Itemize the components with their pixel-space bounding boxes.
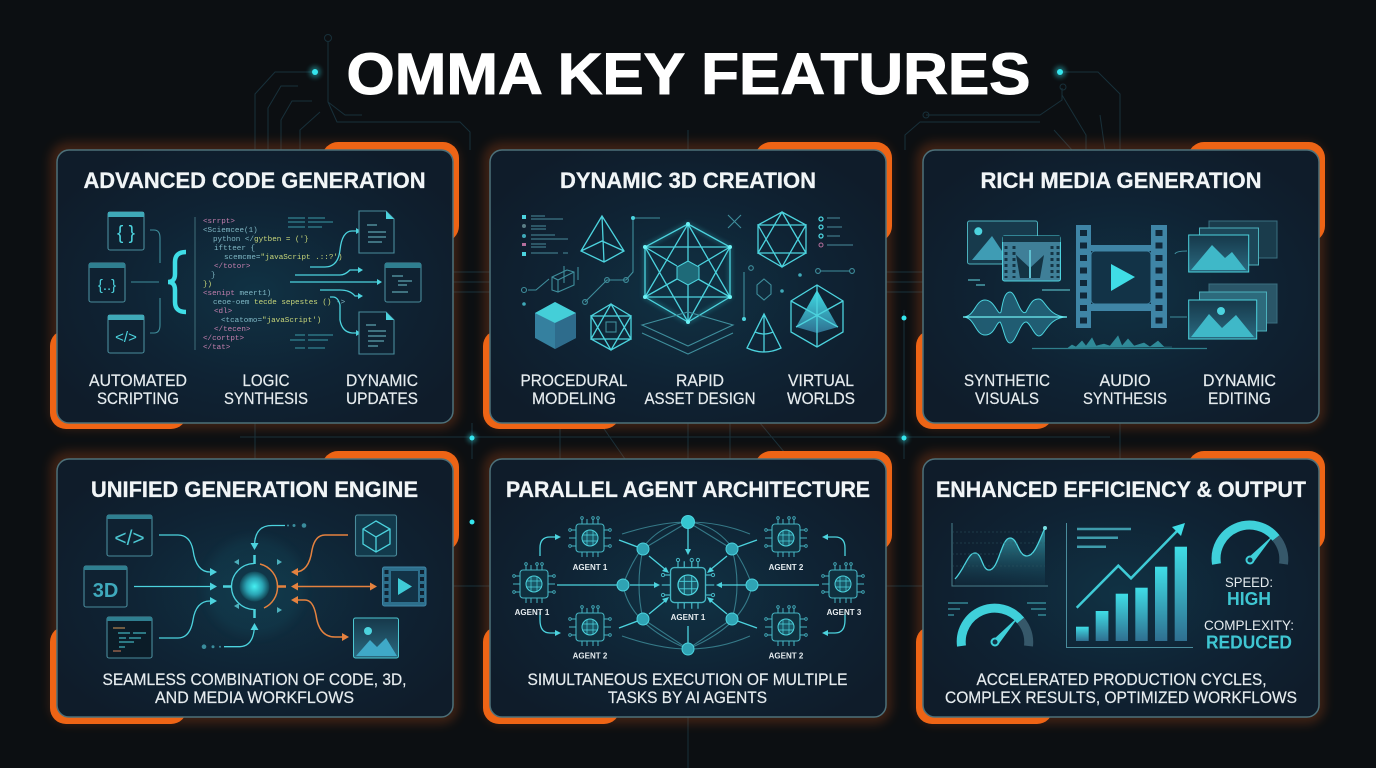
code block: </tat>	[203, 344, 231, 352]
left shapes	[522, 215, 660, 350]
description: SIMULTANEOUS EXECUTION OF MULTIPLE	[528, 671, 848, 689]
code block: <senipt meert1)	[203, 290, 271, 298]
heading: RICH MEDIA GENERATION	[980, 168, 1262, 193]
icons: input windows: </>	[115, 329, 137, 346]
circuit background	[240, 34, 1120, 768]
gauge right	[1216, 525, 1284, 564]
stats: HIGH	[1227, 589, 1271, 609]
network connections	[540, 516, 845, 655]
panel: enhanced efficiency and output	[916, 451, 1325, 724]
agent chips	[513, 517, 864, 660]
agent chips: AGENT 2	[769, 563, 804, 572]
labels: AUDIO	[1100, 372, 1151, 390]
icons: input windows	[89, 212, 160, 353]
agent chips: AGENT 1	[573, 563, 608, 572]
icon: large brace	[168, 252, 186, 312]
labels	[89, 372, 418, 408]
panel: parallel agent architecture	[483, 451, 892, 724]
labels	[964, 372, 1276, 408]
audio waveform	[963, 280, 1070, 343]
area chart	[952, 523, 1048, 586]
agent chips: AGENT 2	[769, 652, 804, 660]
description: TASKS BY AI AGENTS	[608, 689, 767, 707]
image stacks	[1170, 221, 1277, 339]
icons: input windows: { }	[117, 223, 135, 244]
panel: advanced code generation	[50, 142, 459, 429]
description: AND MEDIA WORKFLOWS	[155, 689, 354, 707]
labels: EDITING	[1208, 390, 1271, 408]
description	[528, 671, 848, 707]
bar chart with trend arrow	[1066, 523, 1193, 648]
gauge left	[948, 603, 1046, 646]
heading: PARALLEL AGENT ARCHITECTURE	[506, 477, 870, 502]
central engine with arrows	[134, 523, 377, 649]
agent chips: AGENT 1	[671, 613, 706, 622]
agent chips: AGENT 3	[827, 608, 862, 617]
agent chips: AGENT 1	[515, 608, 550, 617]
labels: MODELING	[532, 390, 616, 408]
agent chips: AGENT 2	[573, 652, 608, 660]
labels: SCRIPTING	[97, 390, 179, 408]
labels	[520, 372, 855, 408]
code block: }	[211, 272, 216, 280]
stats: SPEED:	[1225, 574, 1273, 590]
labels: VISUALS	[975, 390, 1039, 408]
code block: iftteer {	[214, 245, 255, 253]
labels: SYNTHESIS	[1083, 390, 1167, 408]
film strip with play button	[1076, 225, 1167, 328]
right shapes	[728, 212, 854, 352]
heading: ENHANCED EFFICIENCY & OUTPUT	[936, 477, 1306, 502]
labels: DYNAMIC	[1203, 372, 1276, 390]
labels: LOGIC	[242, 372, 290, 390]
description	[945, 671, 1297, 707]
icons: input windows: {..}	[98, 277, 116, 294]
title: OMMA KEY FEATURES	[346, 42, 1030, 107]
code block: </cortpt>	[203, 335, 244, 343]
input icons	[84, 515, 152, 658]
panel: rich media generation	[916, 142, 1325, 429]
labels: UPDATES	[346, 390, 418, 408]
code block: <srrpt>	[203, 218, 235, 226]
code block	[195, 217, 346, 352]
glowing circuit nodes	[309, 66, 1066, 524]
labels: SYNTHETIC	[964, 372, 1050, 390]
stats	[1204, 574, 1294, 652]
heading: DYNAMIC 3D CREATION	[560, 168, 816, 193]
stats: COMPLEXITY:	[1204, 617, 1294, 633]
description: COMPLEX RESULTS, OPTIMIZED WORKFLOWS	[945, 689, 1297, 707]
code block: })	[203, 281, 212, 289]
labels: WORLDS	[787, 390, 855, 408]
labels: DYNAMIC	[346, 372, 418, 390]
labels: PROCEDURAL	[520, 372, 628, 390]
input icons: 3D	[93, 580, 118, 602]
labels: ASSET DESIGN	[644, 390, 756, 408]
code block: <tcatomo="javaScript')	[221, 317, 321, 325]
description: ACCELERATED PRODUCTION CYCLES,	[976, 671, 1266, 689]
stats: REDUCED	[1206, 632, 1292, 652]
heading: ADVANCED CODE GENERATION	[84, 168, 426, 193]
icons: output documents	[359, 211, 421, 354]
synthetic visual images	[968, 221, 1060, 281]
code block: <Sciemcee(1)	[203, 227, 258, 235]
panel: dynamic 3d creation	[483, 142, 892, 429]
labels: SYNTHESIS	[224, 390, 308, 408]
central wireframe hexagon	[642, 222, 733, 354]
code block: python </gytben = ('}	[213, 236, 309, 244]
output arrows	[290, 228, 382, 336]
code block: ceoe-oem tecde sepestes () ->	[213, 299, 346, 307]
description	[102, 671, 406, 707]
heading: UNIFIED GENERATION ENGINE	[91, 477, 418, 502]
description: SEAMLESS COMBINATION OF CODE, 3D,	[102, 671, 406, 689]
code block: </totor>	[214, 263, 251, 271]
panel: unified generation engine	[50, 451, 459, 724]
audio spectrum	[1032, 336, 1207, 348]
labels: RAPID	[676, 372, 724, 390]
labels: AUTOMATED	[89, 372, 187, 390]
code block: scemcme="javaScript .::?')	[224, 254, 342, 262]
code block: <dl>	[214, 308, 233, 316]
input icons: </>	[114, 527, 145, 550]
labels: VIRTUAL	[788, 372, 854, 390]
output icons	[354, 515, 426, 658]
code block: </tecen>	[214, 326, 251, 334]
